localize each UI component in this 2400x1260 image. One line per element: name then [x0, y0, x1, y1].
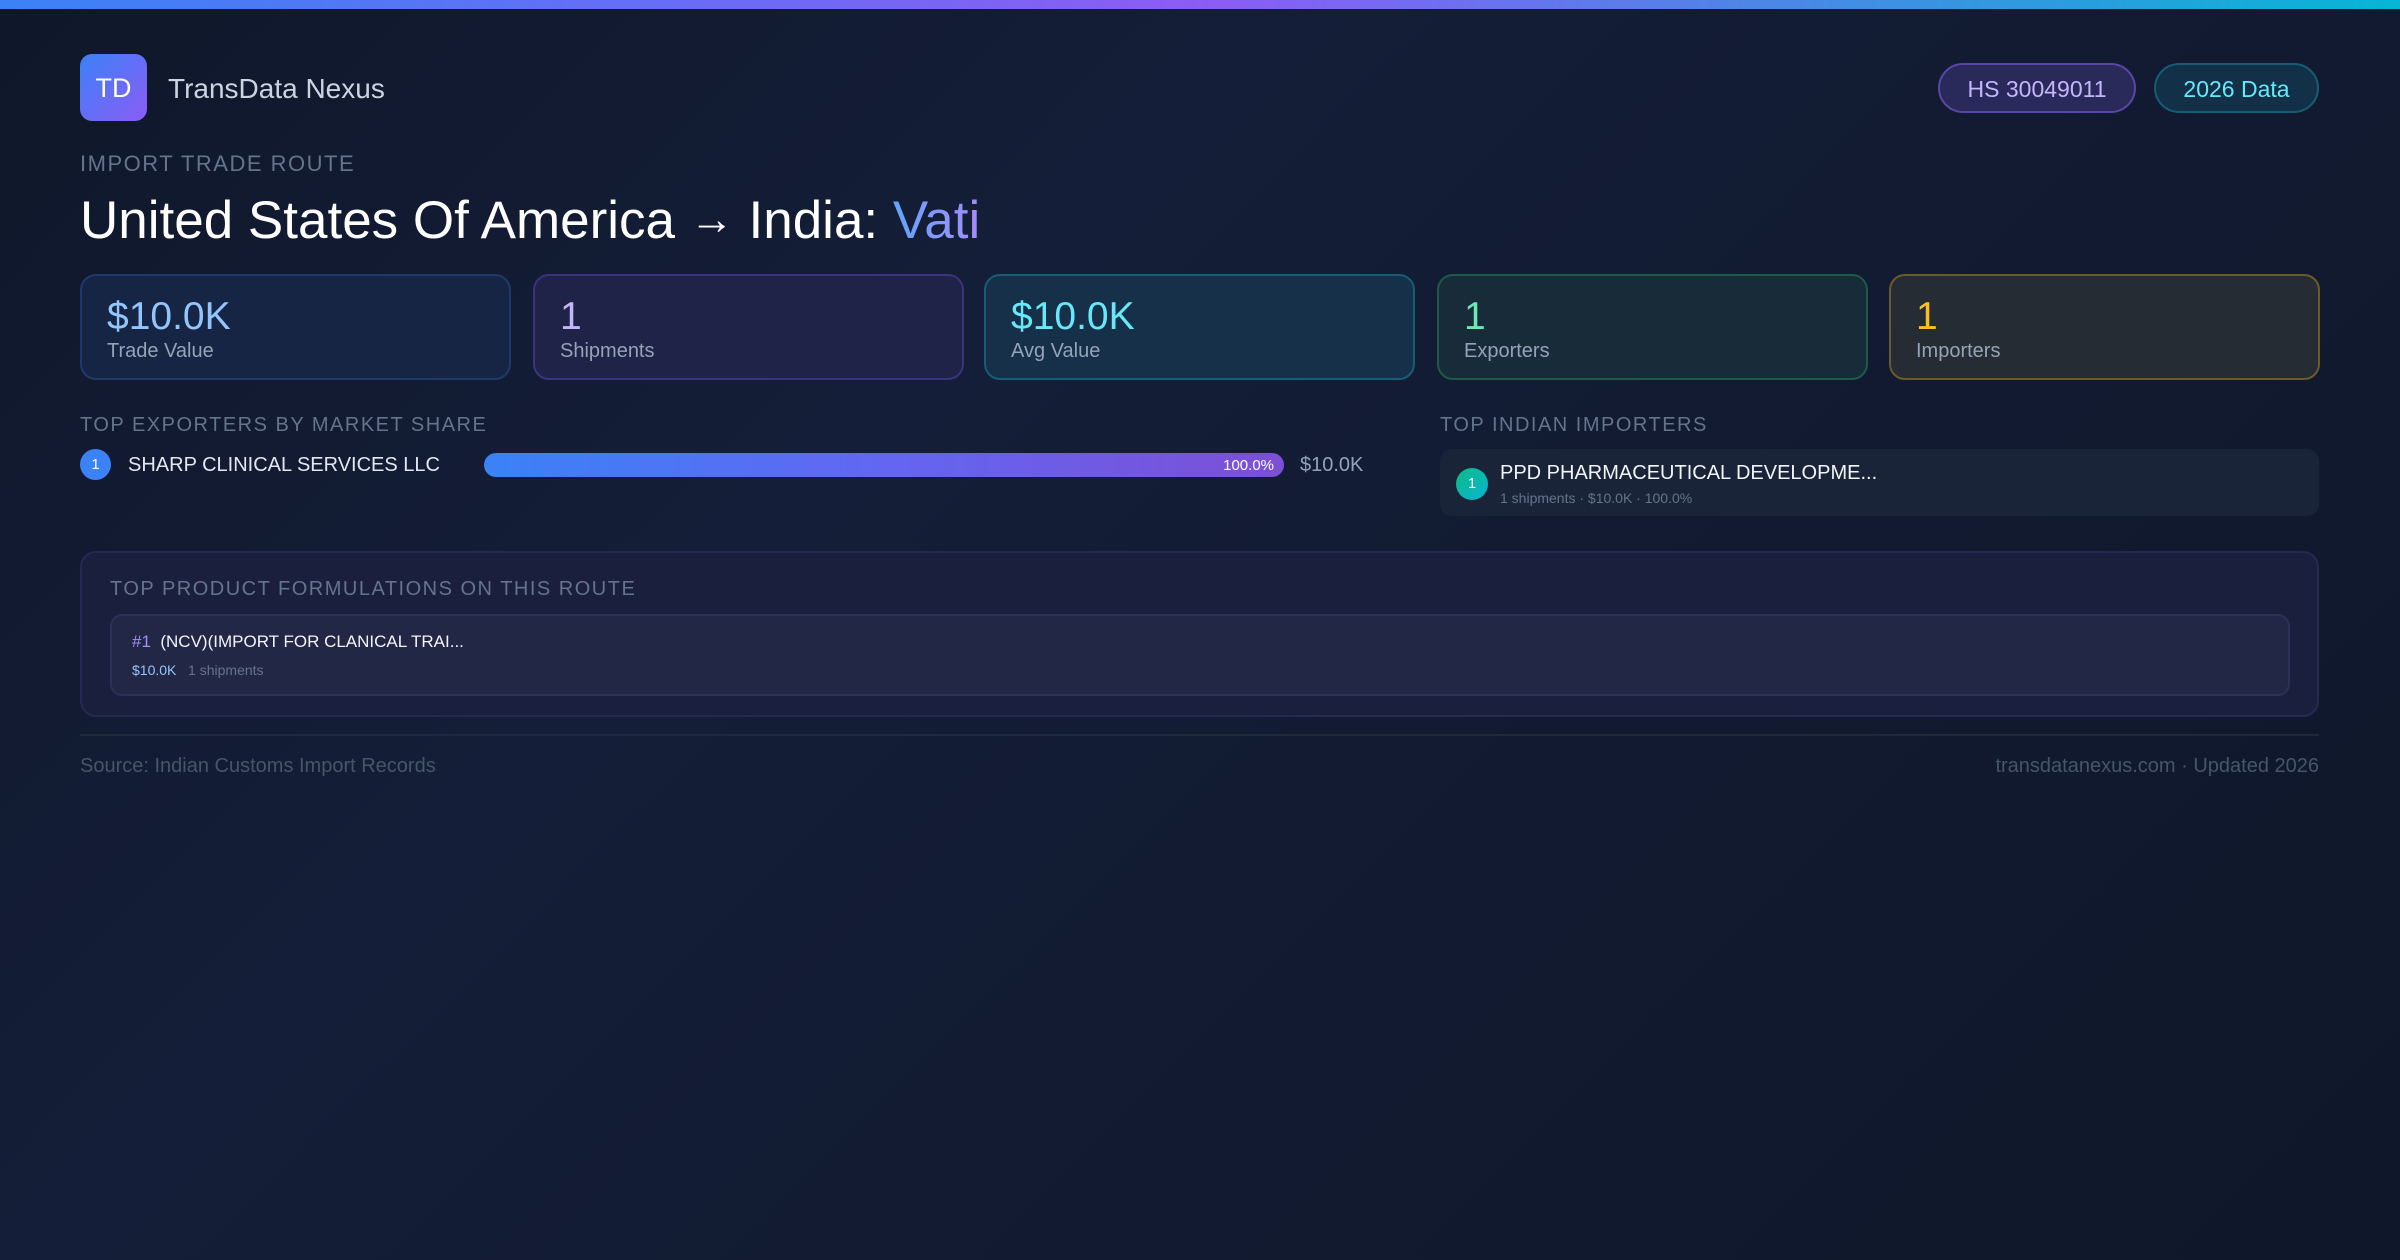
icon: TD logo box: [80, 54, 147, 121]
card: avg value: $10.0K: [1011, 295, 1135, 338]
pill: year: 2026 Data: [2183, 76, 2290, 102]
footer site: transdatanexus.com · Updated 2026: [1995, 755, 2319, 777]
title: United States Of America → India: Vati: [80, 191, 980, 250]
card: avg value: Avg Value: [1011, 340, 1100, 362]
card: avg value: [984, 274, 1415, 380]
card: exporters: Exporters: [1464, 340, 1550, 362]
exporter row: [80, 449, 1363, 480]
importer row: [1440, 449, 2319, 516]
icon: TD logo box: TD: [96, 73, 132, 103]
item meta: $10.0K 1 shipments: [132, 662, 264, 678]
bar: 100.0%: [1223, 457, 1274, 474]
card: trade value: Trade Value: [107, 340, 214, 362]
card: importers: [1889, 274, 2320, 380]
heading: TOP PRODUCT FORMULATIONS ON THIS ROUTE: [110, 578, 636, 600]
importer stats: 1 shipments · $10.0K · 100.0%: [1500, 490, 1692, 506]
pill: year: [2154, 63, 2319, 113]
card: exporters: [1437, 274, 1868, 380]
heading: top importers: TOP INDIAN IMPORTERS: [1440, 414, 1708, 436]
card: importers: Importers: [1916, 340, 2000, 362]
subtitle: IMPORT TRADE ROUTE: [80, 151, 355, 176]
importer name: PPD PHARMACEUTICAL DEVELOPME...: [1500, 462, 1877, 484]
pill: HS code: [1938, 63, 2136, 113]
bar: [484, 453, 1284, 477]
card: shipments: Shipments: [560, 340, 654, 362]
pill: HS code: HS 30049011: [1968, 76, 2106, 102]
heading: top exporters: TOP EXPORTERS BY MARKET SHARE: [80, 414, 487, 436]
card: trade value: [80, 274, 511, 380]
card: importers: 1: [1916, 295, 1938, 338]
rank badge: [1456, 468, 1488, 500]
card: shipments: 1: [560, 295, 582, 338]
logo: [80, 54, 385, 121]
rank badge: 1: [91, 456, 100, 473]
card: shipments: [533, 274, 964, 380]
card: exporters: 1: [1464, 295, 1486, 338]
footer source: Source: Indian Customs Import Records: [80, 755, 436, 777]
panel: formulations: [80, 551, 2319, 717]
value: $10.0K: [1300, 454, 1363, 476]
top gradient bar: [0, 0, 2400, 9]
card: trade value: $10.0K: [107, 295, 231, 338]
formulation item: [110, 614, 2290, 696]
item title: #1 (NCV)(IMPORT FOR CLANICAL TRAI...: [132, 632, 464, 651]
brand name: TransData Nexus: [168, 73, 385, 104]
exporter name: SHARP CLINICAL SERVICES LLC: [128, 454, 440, 476]
rank badge: 1: [1468, 475, 1476, 492]
rank badge: [80, 449, 111, 480]
